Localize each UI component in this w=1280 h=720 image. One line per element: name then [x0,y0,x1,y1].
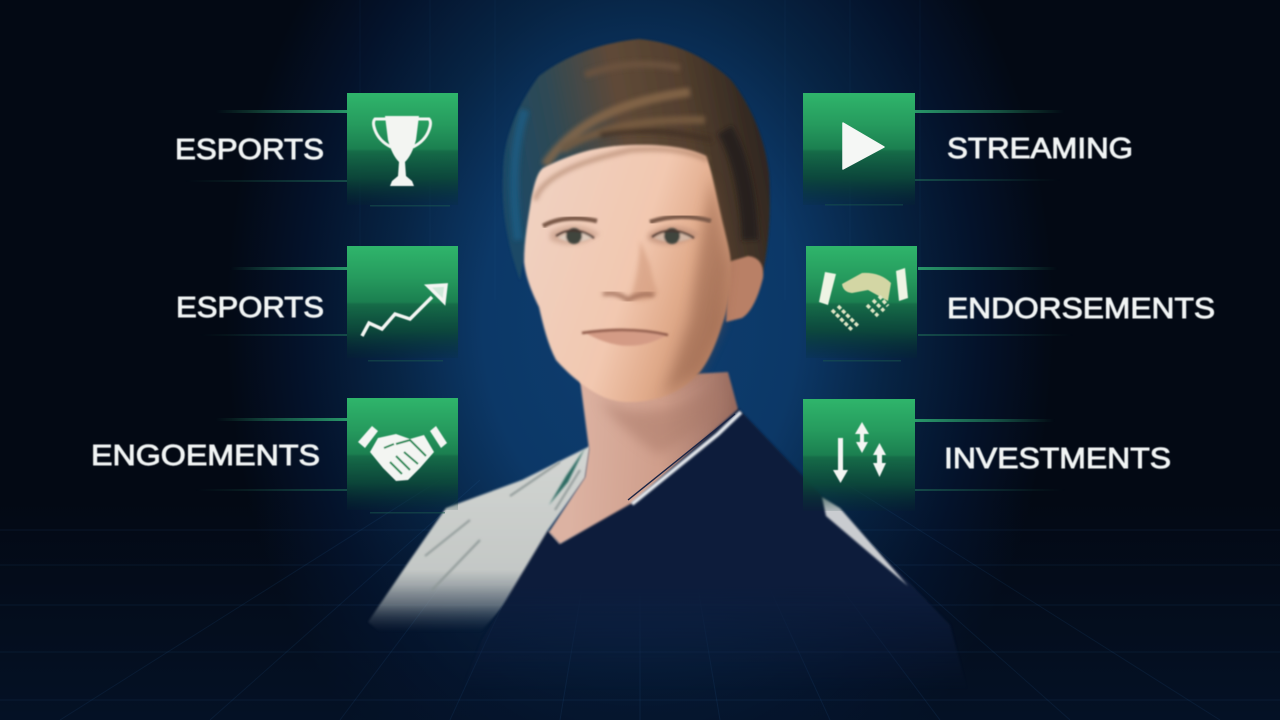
connector lines [825,110,1065,206]
left column: esports growth [176,246,458,362]
connector lines [200,267,443,362]
panel [803,399,915,511]
panel [347,246,458,358]
panel [806,246,917,358]
icon: handshake [819,268,908,330]
forehead hair shadow [535,149,708,200]
left white shoulder [368,446,590,632]
label: INVESTMENTS [944,443,1171,475]
label: ENGOEMENTS [91,440,320,472]
left column: esports trophy [175,93,458,206]
mouth [582,329,668,346]
right column: endorsements [806,246,1215,362]
connector lines [195,418,445,514]
icon: trophy [374,116,430,186]
icon: play [843,123,884,169]
chin shadow [607,404,694,454]
right eye [652,228,694,244]
right shoulder stripe [822,497,908,586]
icon: growth arrow [362,285,446,336]
panel [803,93,915,205]
right eyebrow [650,217,711,222]
nose [630,240,658,301]
right column: streaming [803,93,1133,206]
panel [347,398,458,510]
neck [549,372,738,544]
right eye socket shade [648,226,700,245]
right ear [726,256,763,322]
label: ENDORSEMENTS [947,293,1215,325]
hair highlights [514,64,750,240]
connector lines [185,110,450,206]
collar stripe [632,412,741,504]
shirt [496,408,956,654]
shoulder folds [425,462,580,590]
face right shadow [664,175,728,394]
portrait: young man [368,38,956,654]
left eye socket shade [550,225,600,245]
left column: endorsements handshake [91,398,458,514]
hair mass [502,38,772,277]
label: STREAMING [947,133,1133,165]
face [524,145,731,402]
right column: investments [803,399,1171,511]
left eye [556,228,594,244]
icon: investment arrows [833,422,886,483]
connector lines [823,267,1073,362]
label: ESPORTS [175,134,324,166]
left eyebrow [543,218,597,226]
connector lines [915,419,1065,491]
inner collar [549,448,585,505]
panel [347,93,458,205]
icon: handshake [358,426,447,481]
label: ESPORTS [176,292,324,324]
background floor shade [0,500,1280,720]
